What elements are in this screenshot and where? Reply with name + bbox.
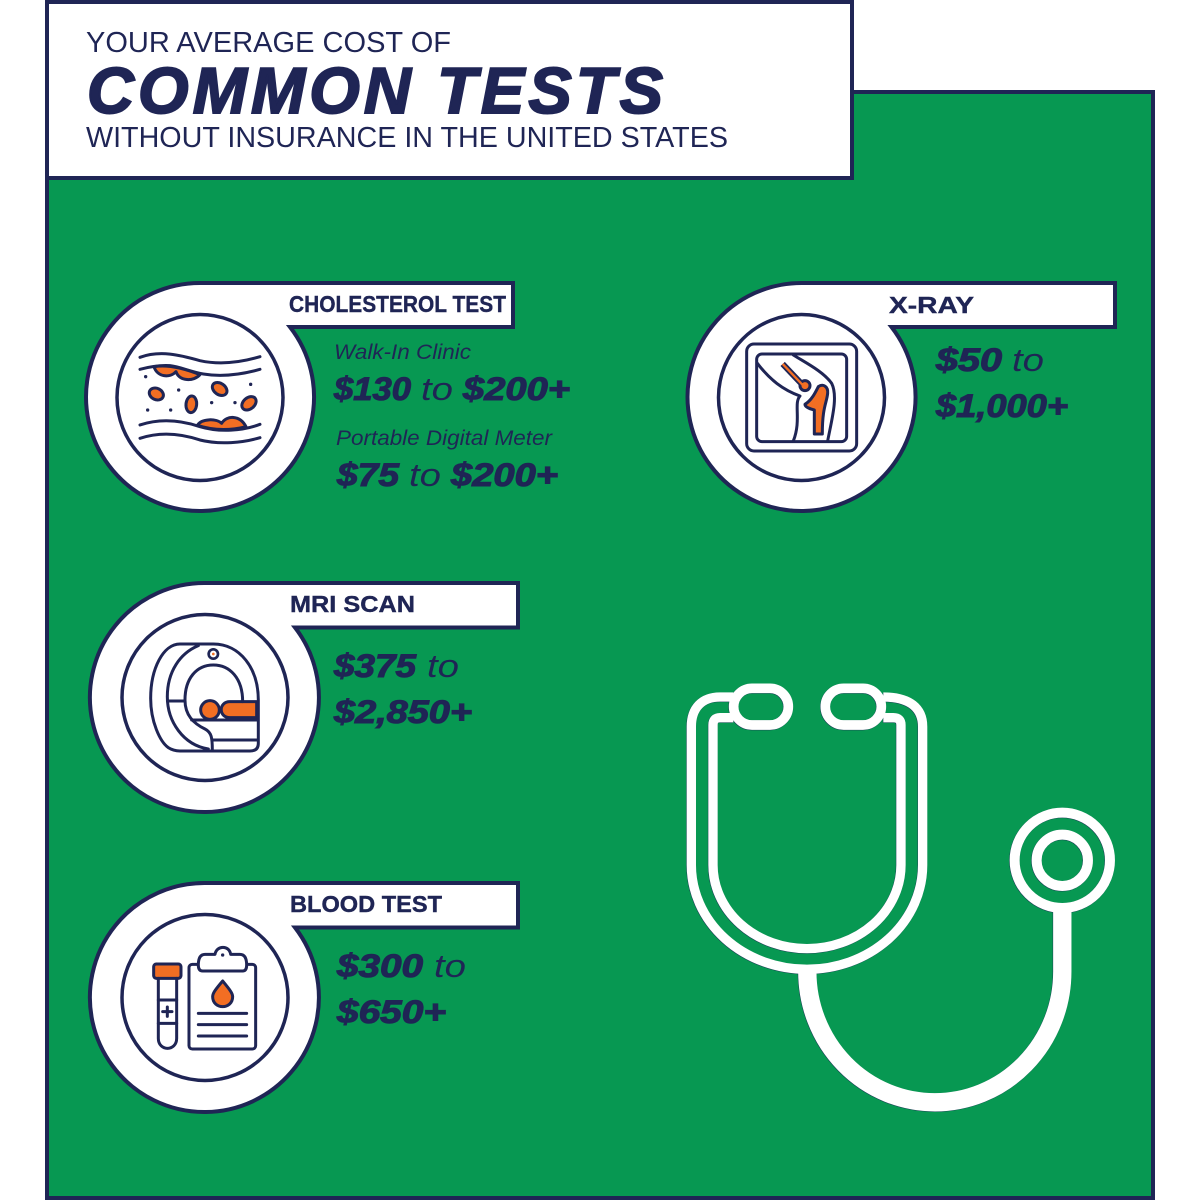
badge: blood test — [90, 883, 518, 1112]
price: mri low: $375 — [333, 648, 417, 684]
badge: cholesterol — [86, 283, 513, 511]
icon: test tube and clipboard — [154, 947, 256, 1049]
icon ring: blood test — [122, 914, 288, 1080]
price: mri high: $2,850+ — [333, 694, 472, 730]
title line 3: WITHOUT INSURANCE IN THE UNITED STATES — [86, 122, 728, 154]
price: x-ray low — [935, 342, 1044, 378]
sublabel: walk-in clinic: Walk-In Clinic — [334, 341, 472, 364]
label: cholesterol test: CHOLESTEROL TEST — [289, 291, 506, 317]
icon ring: x-ray — [718, 314, 884, 480]
icon ring: mri scan — [122, 614, 288, 780]
label: blood test: BLOOD TEST — [290, 891, 442, 917]
panel: blood test — [90, 883, 518, 1112]
price: blood test low: $300 — [336, 948, 423, 984]
badge: mri scan — [90, 583, 518, 812]
icon: stethoscope — [691, 688, 1110, 1102]
icon: knee x-ray — [747, 344, 857, 451]
title block — [47, 2, 852, 178]
icon: mri machine — [151, 644, 258, 751]
price: portable digital meter: $200+ — [450, 457, 558, 493]
badge: x-ray — [688, 283, 1115, 511]
price: blood test low: to — [434, 948, 466, 984]
price: x-ray low: $50 — [935, 342, 1002, 378]
label: mri scan: MRI SCAN — [290, 591, 415, 617]
panel: x-ray — [688, 283, 1115, 511]
price: walk-in clinic: to — [421, 371, 453, 407]
icon ring: cholesterol — [117, 314, 283, 480]
panel: cholesterol test — [86, 283, 570, 511]
price: x-ray high: $1,000+ — [935, 388, 1068, 424]
price: blood test low — [336, 948, 466, 984]
price: blood test high: $650+ — [336, 994, 446, 1030]
sublabel: portable digital meter: Portable Digital Meter — [336, 427, 553, 450]
price: walk-in clinic: $200+ — [462, 371, 570, 407]
price: portable digital meter: to — [409, 457, 441, 493]
price: walk-in clinic: $130 — [333, 371, 411, 407]
label: x-ray: X-RAY — [889, 292, 974, 318]
price: portable digital meter: $75 — [336, 457, 400, 493]
price: portable digital meter — [336, 457, 558, 493]
price: x-ray low: to — [1012, 342, 1044, 378]
title main heading: COMMON TESTS — [87, 54, 666, 127]
price: mri low — [333, 648, 459, 684]
price: mri low: to — [427, 648, 459, 684]
panel: mri scan — [90, 583, 518, 812]
price: walk-in clinic — [333, 371, 570, 407]
title line 1: YOUR AVERAGE COST OF — [86, 27, 451, 59]
icon: artery with plaque — [140, 354, 260, 443]
